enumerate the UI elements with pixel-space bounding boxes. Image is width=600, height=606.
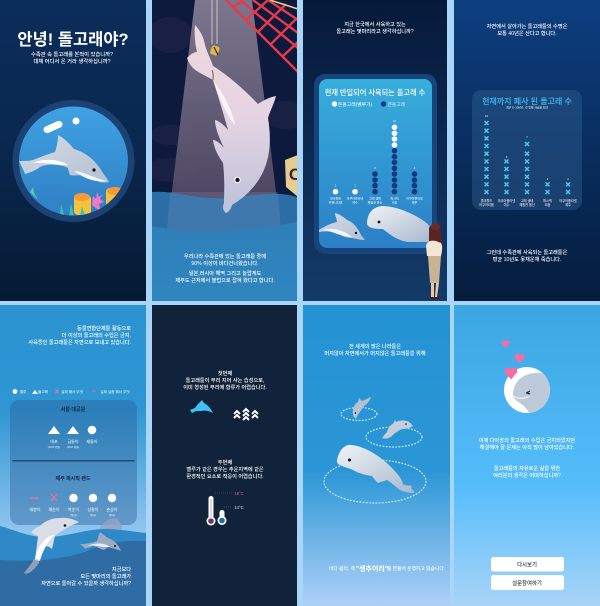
caption: 일본,러시아 해역 그리고 놀랍게도 bbox=[189, 269, 262, 277]
chart title: 현재 반입되어 사육되는 돌고래 수 bbox=[325, 88, 426, 97]
chart card: 고래 생태 bbox=[521, 198, 533, 203]
icon: white waves group bbox=[234, 409, 258, 420]
small dolphin 2 bbox=[382, 420, 413, 439]
icon: thermometers: 14°C bbox=[234, 505, 244, 510]
button: survey bbox=[491, 575, 564, 590]
chart card: 아쿠아플라넷 bbox=[559, 198, 577, 203]
fishing line and hook bbox=[210, 0, 220, 56]
sanctuary intro: 머지않아 자연에서가 머지않은 돌고래들을 위해 bbox=[324, 349, 426, 357]
question text: 돌고래는 몇마리라고 생각하십니까? bbox=[336, 27, 414, 35]
sanctuary intro: 전 세계의 많은 나라들은 bbox=[349, 342, 401, 350]
chart subtitle: 최근 5~10년간, 각 업체 자료를 토대 bbox=[506, 106, 548, 110]
legend: 돈돌고래(벨루가) bbox=[338, 101, 372, 108]
facility card bbox=[10, 400, 137, 525]
Seoul Grand Park: 서울 대공원 bbox=[61, 406, 86, 413]
Jeju Pacific Land: 삼팔이 bbox=[87, 506, 99, 512]
Jeju Pacific Land: (방사) bbox=[109, 513, 115, 517]
chart title: 현재까지 폐사 된 돌고래 수 bbox=[482, 96, 573, 106]
first reason text: 첫번째 bbox=[218, 369, 232, 377]
panel: captive dolphin count bbox=[303, 0, 447, 301]
chart card: 2 bbox=[547, 177, 549, 181]
panel: closing call to action bbox=[454, 305, 600, 606]
dot chart: 12 bbox=[393, 119, 396, 123]
Jeju Pacific Land: 해순이 bbox=[48, 506, 60, 512]
panel: greeting title bbox=[0, 0, 146, 301]
Seoul Grand Park: 금둥이 bbox=[67, 438, 79, 444]
crate sign bbox=[285, 155, 297, 196]
Jeju Pacific Land: (방사) bbox=[70, 513, 77, 517]
Seoul Grand Park: 제돌이 bbox=[86, 438, 98, 444]
legend: 실제 폐사 무엇 bbox=[61, 389, 84, 394]
chart card: 퍼시픽 bbox=[543, 198, 552, 203]
activism text: 더 이상의 돌고래의 수입은 금지, bbox=[62, 331, 131, 339]
second reason text: 벨루가 같은 경우는 추운지역에 같은 bbox=[186, 465, 264, 473]
sanctuary caption bbox=[329, 564, 445, 573]
beluga badge bbox=[504, 367, 550, 413]
activism text bbox=[28, 324, 131, 346]
light beam bbox=[172, 0, 276, 198]
dot chart bbox=[329, 119, 423, 204]
woman viewer bbox=[426, 223, 442, 299]
intro text: 수족관 속 돌고래를 본적이 있습니까? bbox=[31, 50, 113, 58]
porthole with dolphin bbox=[12, 100, 134, 222]
lifespan text: 자연에서 살아가는 돌고래들의 수명은 bbox=[487, 22, 568, 30]
caption: 90% 이상이 바다건너왔습니다. bbox=[191, 259, 259, 267]
title: 안녕! 돌고래야? bbox=[17, 30, 129, 49]
intro text: 대체 어디서 온 거라 생각하십니까? bbox=[33, 57, 111, 65]
panel: deaths count bbox=[454, 0, 600, 301]
Jeju Pacific Land bbox=[29, 475, 118, 517]
button: survey: 설문참여하기 bbox=[512, 579, 542, 587]
chart card: 10 bbox=[485, 114, 488, 118]
closing text: 그런데 수족관에 사육되는 돌고래들은 bbox=[487, 248, 568, 256]
first reason text: 돌고래들이 무리 지어 사는 습성으로, bbox=[186, 376, 264, 384]
caption: 우리나라 수족관에 있는 돌고래들 중에 bbox=[184, 252, 266, 260]
closing message bbox=[479, 436, 575, 479]
closing message: 돌고래들의 자유로운 삶을 위한 bbox=[494, 464, 560, 472]
Seoul Grand Park: (2017.방류) bbox=[48, 445, 60, 449]
activism text: 사육중인 돌고래들은 자연으로 보내고 있습니다. bbox=[28, 338, 131, 346]
chart card bbox=[472, 90, 582, 210]
dot chart: 커뮤니티센 bbox=[329, 200, 343, 204]
question text bbox=[336, 20, 414, 35]
dot chart: 한국돌핀 bbox=[330, 196, 341, 200]
legend: 벨루 bbox=[20, 389, 27, 394]
small dolphin 1 bbox=[353, 397, 371, 419]
chart card: 리솜 bbox=[545, 202, 550, 207]
Jeju Pacific Land: (방사) bbox=[90, 513, 96, 517]
net bbox=[226, 0, 298, 72]
panel: bycatch dolphin bbox=[152, 0, 297, 301]
sanctuary caption: "생추어리" bbox=[356, 564, 388, 573]
closing question: 지금보다 bbox=[112, 565, 131, 573]
closing text: 평균 10년도 못채운채 죽습니다. bbox=[493, 255, 561, 263]
second reason text bbox=[186, 458, 264, 480]
button: replay: 다시보기 bbox=[517, 560, 537, 568]
chart card: 여수 bbox=[504, 202, 509, 207]
dolphin bbox=[19, 135, 109, 183]
intro text bbox=[31, 50, 113, 65]
closing message: 이제 다아상의 돌고래의 수입은 금지되었지만 bbox=[479, 436, 575, 444]
chart card: 2 bbox=[567, 177, 569, 181]
Jeju Pacific Land: 제주 퍼시픽 랜드 bbox=[56, 475, 91, 482]
legend bbox=[332, 101, 405, 108]
icon: thermometers bbox=[206, 491, 244, 526]
first reason text: 이미 형성된 무리에 합류가 어렵습니다. bbox=[183, 383, 267, 391]
beam over back wave bbox=[167, 192, 281, 232]
dot chart: 1 bbox=[335, 184, 337, 188]
Seoul Grand Park: (2017.방류) bbox=[67, 445, 79, 449]
legend: 실제 실종 폐사 무엇 bbox=[100, 389, 130, 394]
panel: release campaign bbox=[0, 305, 146, 606]
lifespan text bbox=[487, 22, 568, 37]
legend: 큰돌고래 bbox=[388, 101, 405, 108]
button: replay bbox=[491, 557, 564, 572]
chart card: 아쿠아플라넷 bbox=[498, 198, 515, 203]
dot chart: 여수 bbox=[352, 200, 358, 204]
Jeju Pacific Land: 복순이 bbox=[68, 506, 79, 512]
legend: 돌고래 bbox=[38, 389, 48, 394]
Jeju Pacific Land: 춘삼이 bbox=[106, 506, 118, 512]
second reason text: 두번째 bbox=[218, 458, 232, 466]
hanging dolphin bbox=[187, 25, 276, 213]
beluga illustration bbox=[367, 206, 432, 242]
dolphin illustration bbox=[319, 213, 365, 240]
first reason text bbox=[183, 369, 267, 391]
dot chart: 아쿠아플라넷 bbox=[406, 196, 423, 200]
dot chart: 퍼시픽 bbox=[390, 196, 399, 200]
back dolphin bbox=[100, 518, 122, 530]
caption: 제주도 근처에서 불법으로 잡혀 왔다고 합니다. bbox=[175, 276, 275, 284]
dot chart: 아쿠아플라넷 bbox=[347, 196, 364, 200]
dot chart: 4 bbox=[414, 166, 416, 170]
beluga bbox=[337, 445, 414, 493]
Seoul Grand Park: 대포 bbox=[50, 438, 58, 444]
chart card: 제주 bbox=[565, 202, 571, 207]
dot chart: 리솜 bbox=[392, 200, 397, 204]
Jeju Pacific Land: 태봉이 bbox=[29, 506, 41, 512]
yellow rope bbox=[270, 0, 298, 9]
chart card: 7 bbox=[526, 135, 528, 139]
dot chart: 1 bbox=[354, 184, 356, 188]
big dolphin bbox=[24, 518, 79, 574]
closing question: 모든 몇마리의 돌고래가 bbox=[80, 572, 131, 580]
sea front wave bbox=[152, 222, 297, 301]
panel: sea sanctuary bbox=[303, 305, 450, 606]
question text: 지금 한국에서 사육하고 있는 bbox=[344, 20, 406, 28]
chart card bbox=[314, 74, 437, 254]
Seoul Grand Park bbox=[48, 406, 98, 449]
chart card: 5 bbox=[506, 155, 508, 159]
caption bbox=[175, 252, 275, 284]
sanctuary rings bbox=[324, 408, 426, 503]
closing message: 해결해야 할 문제는 아직 많이 남아있습니다. bbox=[480, 443, 574, 451]
x mark chart bbox=[484, 121, 570, 194]
legend bbox=[13, 389, 130, 394]
hearts bbox=[501, 341, 525, 380]
dot chart: 체험관 울산 bbox=[368, 200, 383, 204]
dot chart: 제주 bbox=[412, 200, 417, 204]
sanctuary caption: 바다 쉼터, 즉 bbox=[329, 565, 356, 572]
panel: release difficulties bbox=[152, 305, 297, 606]
closing question bbox=[41, 566, 131, 586]
small dolphin bbox=[80, 532, 121, 551]
closing message: 여러분의 생각은 어떠하십니까? bbox=[493, 471, 561, 479]
chart card: 체험관 울산 bbox=[519, 202, 535, 207]
icon: cyan dolphin bbox=[190, 400, 213, 413]
dot chart: 고래 생태 bbox=[369, 196, 381, 200]
highlights bbox=[42, 120, 64, 134]
closing question: 자연으로 돌아갈 수 있을까 생각하십니까? bbox=[41, 579, 131, 587]
chart card: 롯데월드 bbox=[481, 198, 492, 203]
lifespan text: 보통 40년은 산다고 합니다. bbox=[497, 29, 557, 37]
crate sign: C bbox=[289, 165, 301, 184]
night clouds bbox=[152, 17, 297, 182]
sea back wave bbox=[152, 192, 297, 232]
sanctuary intro bbox=[324, 342, 426, 357]
dot chart: 4 bbox=[374, 166, 376, 170]
waves bbox=[0, 526, 146, 561]
chart card: 아쿠아리움 bbox=[479, 202, 494, 207]
sanctuary caption: 를 만들어 운영하고 있습니다. bbox=[387, 565, 445, 572]
second reason text: 환경적인 요소로 적응이 어렵습니다. bbox=[186, 472, 264, 480]
activism text: 동물연합단체들 활동으로 bbox=[77, 324, 131, 332]
icon: thermometers: 18°C bbox=[234, 491, 244, 496]
closing text bbox=[487, 248, 568, 263]
